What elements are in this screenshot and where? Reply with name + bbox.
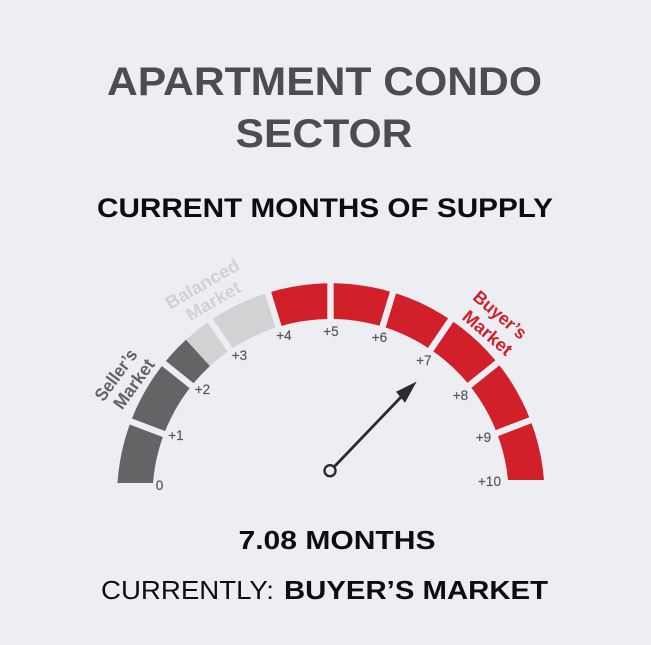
seller's market segments xyxy=(118,340,210,483)
label: buyer's market xyxy=(459,287,531,360)
market status: BUYER’S MARKET xyxy=(284,575,548,605)
scale labels: +2 xyxy=(195,382,210,397)
label: balanced market: Balanced xyxy=(162,255,243,313)
label: seller's market xyxy=(91,345,159,413)
subtitle: CURRENT MONTHS OF SUPPLY xyxy=(97,193,553,223)
market status: CURRENTLY: xyxy=(101,575,274,605)
scale labels: +6 xyxy=(372,330,387,345)
scale labels: +5 xyxy=(323,324,339,339)
scale labels: 0 xyxy=(156,478,163,493)
buyer's market segments xyxy=(268,283,544,480)
gauge arc xyxy=(118,272,544,483)
scale labels xyxy=(156,324,501,493)
scale labels: +8 xyxy=(453,388,468,403)
label: buyer's market: Market xyxy=(459,306,516,360)
reading value: 7.08 MONTHS xyxy=(238,525,436,555)
segment gaps xyxy=(120,272,541,437)
title: APARTMENT CONDO xyxy=(107,60,542,104)
label: seller's market: Seller’s xyxy=(91,345,141,405)
balanced market segments xyxy=(186,293,278,366)
label: seller's market: Market xyxy=(109,355,159,413)
scale labels: +1 xyxy=(168,428,184,443)
market status xyxy=(101,575,548,605)
scale labels: +4 xyxy=(276,328,292,343)
title: SECTOR xyxy=(236,112,413,156)
label: balanced market: Market xyxy=(183,277,244,325)
scale labels: +9 xyxy=(476,430,491,445)
needle xyxy=(324,382,417,476)
scale labels: +10 xyxy=(478,474,501,489)
title xyxy=(107,60,542,156)
scale labels: +7 xyxy=(416,353,432,368)
scale labels: +3 xyxy=(232,348,247,363)
label: buyer's market: Buyer’s xyxy=(469,287,531,343)
